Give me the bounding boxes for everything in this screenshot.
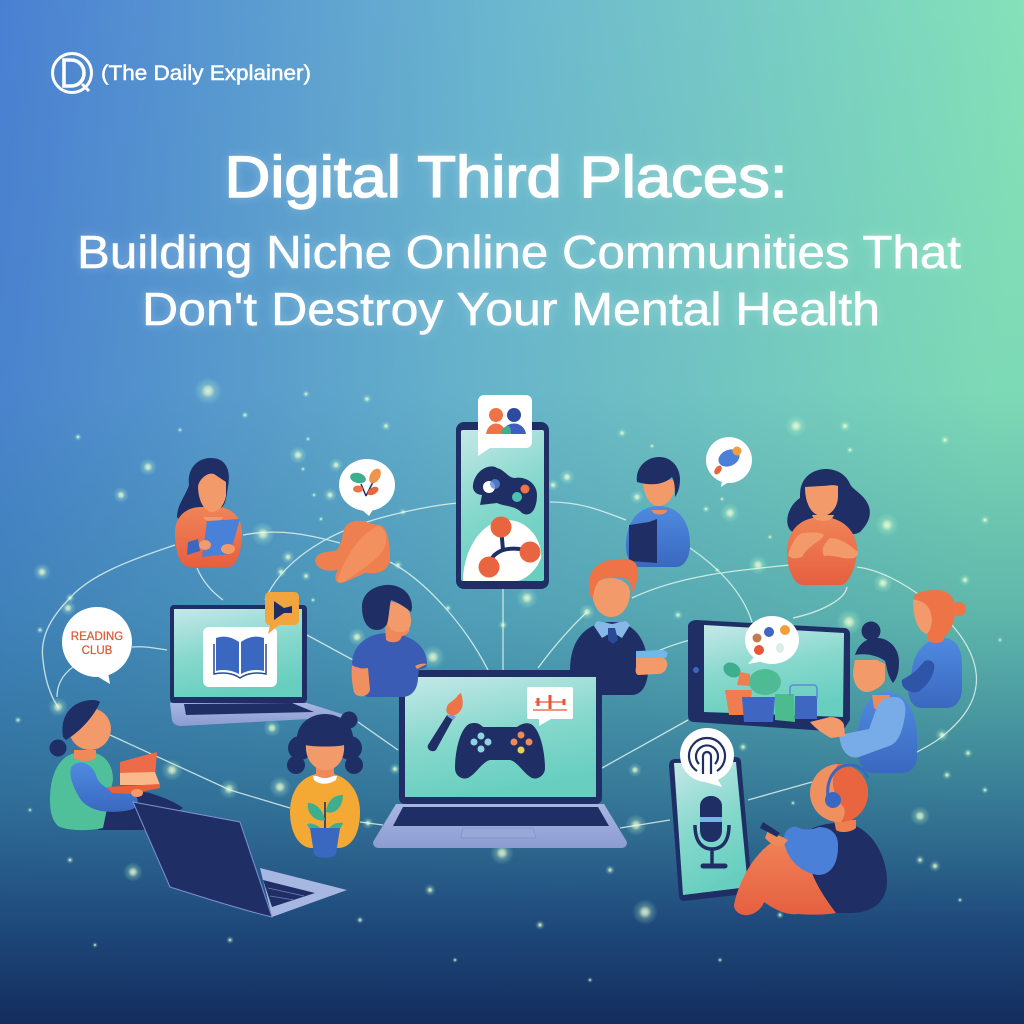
- tablet: right with plants: [688, 616, 850, 732]
- speech bubble: plant: [339, 459, 395, 516]
- icon: game controller: [455, 723, 545, 779]
- person: curly hair with plant: [287, 712, 363, 858]
- title: Don't Destroy Your Mental Health: [142, 283, 880, 335]
- speech bubble: reading club: CLUB: [82, 645, 113, 657]
- title: Digital Third Places:: [224, 145, 788, 210]
- person: reading woman, left: [50, 700, 183, 830]
- icon: paintbrush: [428, 693, 463, 751]
- speech bubble: reading club: READING: [71, 631, 123, 643]
- left laptop with book: [170, 592, 345, 726]
- person: woman with tablet, top left: [175, 458, 242, 567]
- icon: orange abstract shape: [315, 521, 390, 583]
- speech bubble: palette dots: [745, 616, 799, 664]
- title: Building Niche Online Communities That: [77, 226, 961, 278]
- person: man with orange hair, centre: [570, 559, 668, 695]
- title: Don't Destroy Your Mental Health: [142, 283, 880, 335]
- icon: gamepad on phone: [473, 466, 537, 514]
- centre laptop: [373, 670, 627, 848]
- speech bubble: audio waveform: [527, 687, 573, 726]
- speech bubble: people: [478, 395, 532, 456]
- title: [77, 145, 961, 335]
- phone: centre top: [456, 422, 549, 589]
- logo: The Daily Explainer: (The Daily Explainer): [101, 62, 311, 85]
- icon: podcast signal bubble: [680, 728, 734, 787]
- network connection lines: [42, 502, 976, 828]
- person: far right, orange hair: [902, 590, 966, 708]
- title: Digital Third Places:: [224, 145, 788, 210]
- logo: The Daily Explainer: [52, 54, 311, 92]
- icon: network in white shape: [463, 516, 541, 581]
- phone: microphone: [669, 757, 752, 901]
- person: woman with wavy hair, top right: [787, 469, 870, 585]
- person: woman with bun, blue sweater: [810, 622, 917, 773]
- icon: orange play bubble: [265, 592, 299, 634]
- person: sitting with headset: [734, 764, 887, 915]
- person: man with book, top right: [626, 457, 690, 567]
- glowing particles: [14, 377, 1003, 983]
- dark laptop, bottom left: [133, 802, 347, 917]
- icon: open book: [203, 627, 277, 687]
- speech bubble: palette: [706, 437, 752, 487]
- speech bubble: reading club: [62, 607, 132, 684]
- person: dark hair, blue shirt, centre left: [352, 585, 427, 697]
- title: Building Niche Online Communities That: [77, 226, 961, 278]
